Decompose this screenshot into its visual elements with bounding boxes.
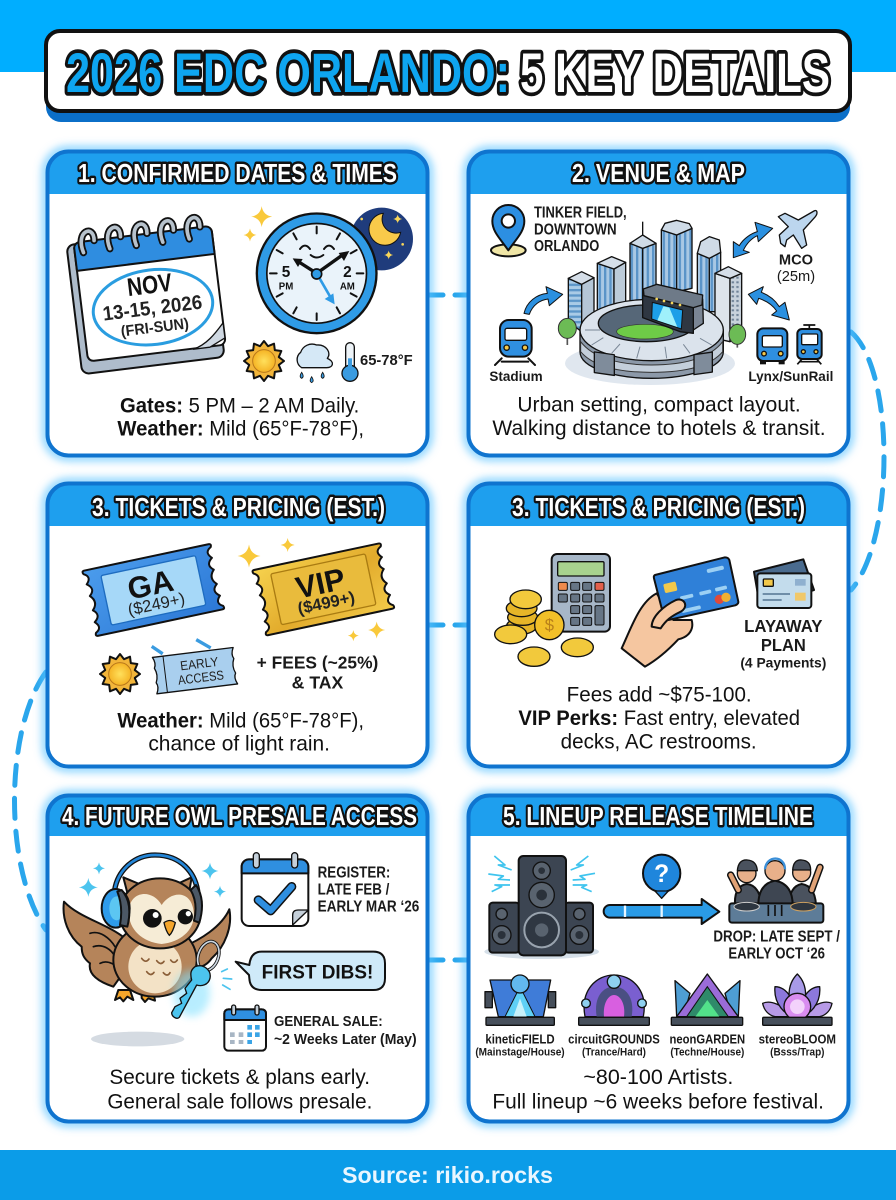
arrow: venue to airport <box>733 222 773 258</box>
label: register dates: LATE FEB / <box>318 881 390 898</box>
text: fees and perks <box>518 682 800 753</box>
panel 5 contents <box>475 855 841 1113</box>
icon: calendar with circled date: 13-15, 2026 <box>102 292 203 326</box>
icon: smiling clock: AM <box>340 281 355 292</box>
text: weather <box>117 707 364 756</box>
arrow: venue to transit <box>748 287 789 320</box>
label: MCO: (25m) <box>777 269 815 285</box>
label: register dates: EARLY MAR ‘26 <box>318 899 420 916</box>
panel: 3 tickets and pricing, left <box>46 482 429 768</box>
text: fees and perks: Fees add ~$75-100. <box>567 682 752 707</box>
icon: circuitGROUNDS stage <box>579 975 649 1025</box>
connector: row 1 dashed link <box>429 292 467 298</box>
panel: 5 lineup release timeline <box>467 794 850 1123</box>
arrow: timeline <box>604 899 719 924</box>
panel 2 contents <box>489 205 833 440</box>
text: weather: Weather: Mild (65°F-78°F), <box>117 707 364 732</box>
label: register dates: REGISTER: <box>318 864 390 881</box>
footer source text: Source: rikio.rocks <box>342 1162 553 1188</box>
text: fees and perks: decks, AC restrooms. <box>561 728 757 753</box>
text: gates and weather <box>117 392 364 441</box>
callout: first dibs: FIRST DIBS! <box>262 962 373 983</box>
top blue band <box>0 0 896 72</box>
text: artist count: ~80-100 Artists. <box>583 1064 733 1089</box>
label: layaway plan: PLAN <box>761 635 806 655</box>
label: kineticFIELD: (Mainstage/House) <box>475 1047 565 1059</box>
icon: GA ticket: GA <box>125 564 177 607</box>
text: urban setting <box>492 392 826 440</box>
icon: wallet cards <box>754 559 814 608</box>
arrow: stadium train to venue <box>524 287 563 314</box>
label: general sale: GENERAL SALE: <box>274 1014 383 1030</box>
icon: stereoBLOOM stage <box>763 974 832 1025</box>
icon: calculator <box>552 554 610 632</box>
icon: VIP ticket <box>252 543 394 636</box>
label: MCO <box>777 252 815 285</box>
icon: smiling clock: 2 <box>343 264 352 281</box>
text: urban setting: Urban setting, compact layout. <box>517 392 801 417</box>
icon: bus and tram <box>757 325 822 364</box>
panel 1 contents <box>65 206 413 441</box>
icon: question bubble: ? <box>654 861 669 888</box>
footer band with source <box>0 1150 896 1200</box>
panel: 4 future owl presale access <box>46 794 429 1123</box>
icon: smiling clock: 5 <box>282 264 291 281</box>
label: register dates <box>318 864 420 916</box>
icon: sparkles <box>243 206 272 241</box>
icon: trees <box>558 318 746 348</box>
label: lineup drop dates: DROP: LATE SEPT / <box>713 929 841 946</box>
connector: left curved dashed link <box>14 672 46 930</box>
label: circuitGROUNDS: circuitGROUNDS <box>568 1031 660 1046</box>
icon: general sale calendar <box>224 1005 266 1051</box>
icon: smiling clock <box>256 212 378 334</box>
label: MCO: MCO <box>779 252 813 268</box>
heading 3 right: 3. TICKETS & PRICING (EST.) <box>512 492 805 522</box>
icon: downtown skyline <box>568 220 742 342</box>
panel: 3 tickets and pricing, right <box>467 482 850 768</box>
callout: first dibs <box>236 952 385 990</box>
heading 4: 4. FUTURE OWL PRESALE ACCESS <box>62 801 417 831</box>
icon: VIP ticket: ($499+) <box>296 588 356 618</box>
icon: three DJs at deck <box>729 859 823 923</box>
icon: calendar with circled date: NOV <box>126 269 174 302</box>
label: venue name: ORLANDO <box>534 238 599 255</box>
label: layaway plan: LAYAWAY <box>744 616 822 636</box>
icon: shadow under owl <box>91 1032 184 1046</box>
connector: right curved dashed link <box>851 332 884 590</box>
icon: VIP ticket: VIP <box>293 562 348 606</box>
icon: glowing key <box>172 938 232 1018</box>
label: Lynx/SunRail: Lynx/SunRail <box>748 368 833 384</box>
label: circuitGROUNDS: (Trance/Hard) <box>582 1047 646 1059</box>
label: general sale: ~2 Weeks Later (May) <box>274 1032 417 1048</box>
heading 5: 5. LINEUP RELEASE TIMELINE <box>503 801 813 831</box>
label: fees and tax: & TAX <box>292 672 344 692</box>
text: secure tickets: Secure tickets & plans early. <box>109 1064 370 1089</box>
text: secure tickets: General sale follows presale. <box>107 1088 372 1113</box>
heading 3 left: 3. TICKETS & PRICING (EST.) <box>92 492 385 522</box>
icon: kineticFIELD stage <box>485 975 556 1025</box>
panel 3 left contents <box>82 538 394 756</box>
label: circuitGROUNDS <box>568 1031 660 1059</box>
icon: thermometer <box>342 343 358 381</box>
icon: calendar with circled date <box>65 216 227 374</box>
icon: coin stacks: $ <box>545 616 554 635</box>
icon: smiling clock: PM <box>279 281 293 292</box>
panel: 2 venue and map <box>467 150 850 457</box>
text: weather: chance of light rain. <box>148 731 330 756</box>
text: gates and weather: Weather: Mild (65°F-78°F), <box>117 416 364 441</box>
connector: row 3 dashed link <box>429 958 467 962</box>
label: kineticFIELD <box>475 1031 565 1059</box>
label: venue name <box>534 205 627 255</box>
icon: coin stacks <box>495 590 593 666</box>
icon: GA ticket: ($249+) <box>126 589 187 619</box>
label: lineup drop dates: EARLY OCT ‘26 <box>728 945 825 962</box>
icon: stadium train <box>495 320 535 365</box>
icon: neonGARDEN stage <box>671 974 743 1025</box>
text: secure tickets <box>107 1064 372 1113</box>
label: layaway plan: (4 Payments) <box>740 655 826 671</box>
icon: early access ticket: ACCESS <box>177 667 225 688</box>
label: layaway plan <box>740 616 826 671</box>
icon: check calendar <box>242 853 308 926</box>
label: general sale <box>274 1014 417 1048</box>
title: blue part: 2026 EDC ORLANDO: <box>66 41 510 104</box>
icon: airplane <box>778 210 817 248</box>
icon: sun <box>244 341 284 381</box>
icon: sun <box>100 654 140 694</box>
title banner <box>46 31 850 122</box>
label: temperature range: 65-78°F <box>360 353 413 369</box>
icon: owl with headphones <box>64 855 230 1002</box>
label: Stadium: Stadium <box>489 368 543 384</box>
icon: question bubble <box>643 855 680 898</box>
icon: gold sparkles <box>237 538 385 641</box>
label: lineup drop dates <box>713 929 841 962</box>
panel: 1 confirmed dates and times <box>46 150 429 457</box>
icon: stadium with stage <box>565 284 735 385</box>
label: venue name: DOWNTOWN <box>534 221 617 238</box>
icon: cyan sparkles <box>79 862 226 898</box>
icon: night moon <box>350 208 413 270</box>
text: artist count: Full lineup ~6 weeks before festival. <box>492 1088 824 1113</box>
label: stereoBLOOM: (Bsss/Trap) <box>770 1047 825 1059</box>
connector: row 2 dashed link <box>429 622 467 628</box>
icon: rain cloud <box>297 344 332 383</box>
text: artist count <box>492 1064 824 1113</box>
label: neonGARDEN: neonGARDEN <box>669 1031 745 1046</box>
icon: hand holding credit card <box>622 557 738 667</box>
icon: early access ticket: EARLY <box>179 654 219 673</box>
text: fees and perks: VIP Perks: Fast entry, elevated <box>518 705 800 730</box>
label: kineticFIELD: kineticFIELD <box>485 1031 555 1046</box>
panel 4 contents <box>64 853 420 1113</box>
text: gates and weather: Gates: 5 PM – 2 AM Daily. <box>120 392 359 417</box>
heading 1: 1. CONFIRMED DATES & TIMES <box>78 158 397 188</box>
label: fees and tax: + FEES (~25%) <box>257 652 378 672</box>
icon: GA ticket <box>82 544 224 636</box>
label: venue name: TINKER FIELD, <box>534 205 627 222</box>
label: neonGARDEN <box>669 1031 745 1059</box>
heading 2: 2. VENUE & MAP <box>572 158 745 188</box>
label: fees and tax <box>257 652 378 692</box>
label: neonGARDEN: (Techne/House) <box>670 1047 745 1059</box>
icon: speakers with lightning <box>484 856 599 959</box>
icon: calendar with circled date: (FRI-SUN) <box>120 315 190 341</box>
icon: early access ticket <box>151 635 238 694</box>
text: urban setting: Walking distance to hotels & transit. <box>492 415 826 440</box>
label: stereoBLOOM <box>759 1031 836 1059</box>
label: stereoBLOOM: stereoBLOOM <box>759 1031 836 1046</box>
panel 3 right contents <box>495 554 826 753</box>
icon: location pin <box>491 205 526 256</box>
